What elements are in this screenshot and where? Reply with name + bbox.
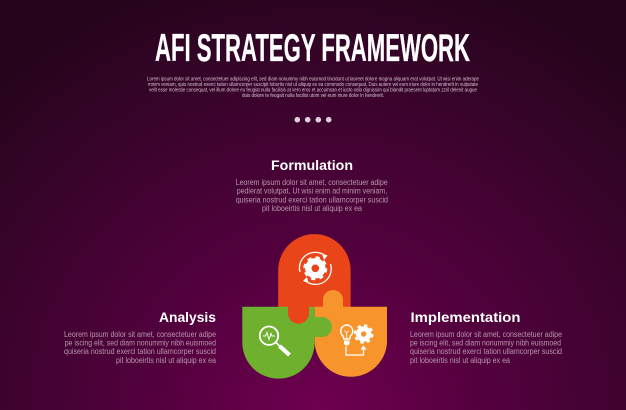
text block: Implementation: Leorem ipsum dolor sit amet, consectetuer adipe	[410, 330, 562, 339]
icon: magnifier with pulse	[260, 326, 290, 355]
pagination dots	[294, 117, 332, 122]
heading: Formulation: Formulation	[271, 157, 353, 173]
subtitle text block: minim veniam, quis nostrud exerci tation ullamcorper suscipit lobortis nisl ut aliquip ex ea commodo consequat. Duis autem vel eum iriure dolor in hendrerit in vulputate	[148, 82, 478, 88]
puzzle diagram	[242, 234, 387, 379]
puzzle piece: green analysis	[242, 307, 315, 379]
heading: Analysis: Analysis	[159, 309, 216, 325]
text block: Formulation: Leorem ipsum dolor sit amet, consectetuer adipe	[236, 178, 388, 187]
text block: Analysis: pe iscing elit, sed diam nonummiy nibh euismoed	[65, 339, 216, 348]
icon: bulb, gear and arrow	[341, 325, 372, 355]
puzzle tab: green into orange	[314, 317, 332, 337]
puzzle piece: red formulation	[278, 234, 351, 310]
subtitle text block: Lorem ipsum dolor sit amet, consectetuer adipiscing elit, sed diam nonummy nibh euismod tincidunt ut laoreet dolore magna aliquam erat volutpat. Ut wisi enim aderape	[147, 76, 479, 82]
icon: gear with cycle arrows	[299, 252, 331, 284]
text block: Analysis: Leorem ipsum dolor sit amet, consectetuer adipe	[64, 330, 216, 339]
text block: Formulation: pit loboeirtis nisl ut aliquip ex ea	[262, 204, 362, 213]
subtitle text block: velit esse molestie consequat, vel illum dolore eu feugiat nulla facilisis at vero eros et accumsan et iusto odio dignissim qui blandit praesent luptatum zzril delenit augue	[149, 88, 477, 94]
text block: Analysis: quiseria nostrud exerci tation ullamcorper suscid	[64, 347, 216, 356]
subtitle text block: duis dolore te feugait nulla facilisi utom vel eum iriure dolor in hendrerit.	[242, 93, 384, 99]
text block: Implementation: pit loboeirtis nisl ut aliquip ex ea	[410, 356, 510, 365]
text block: Analysis: pit loboeirtis nisl ut aliquip ex ea	[116, 356, 216, 365]
text block: Formulation	[236, 178, 388, 213]
text block: Implementation: quiseria nostrud exerci tation ullamcorper suscid	[410, 347, 562, 356]
text block: Analysis	[64, 330, 216, 365]
text block: Implementation: pe iscing elit, sed diam nonummiy nibh euismoed	[410, 339, 561, 348]
puzzle tab: orange into red	[323, 290, 343, 308]
subtitle text block	[147, 76, 479, 99]
text block: Formulation: quiseria nostrud exerci tation ullamcorper suscid	[236, 195, 388, 204]
puzzle piece: orange implementation	[315, 307, 387, 377]
text block: Formulation: pedierat volutpat. Ut wisi enim ad minim veniam,	[237, 187, 387, 196]
text block: Implementation	[410, 330, 562, 365]
heading: Implementation: Implementation	[410, 309, 520, 325]
puzzle tab: red into green	[288, 305, 309, 324]
